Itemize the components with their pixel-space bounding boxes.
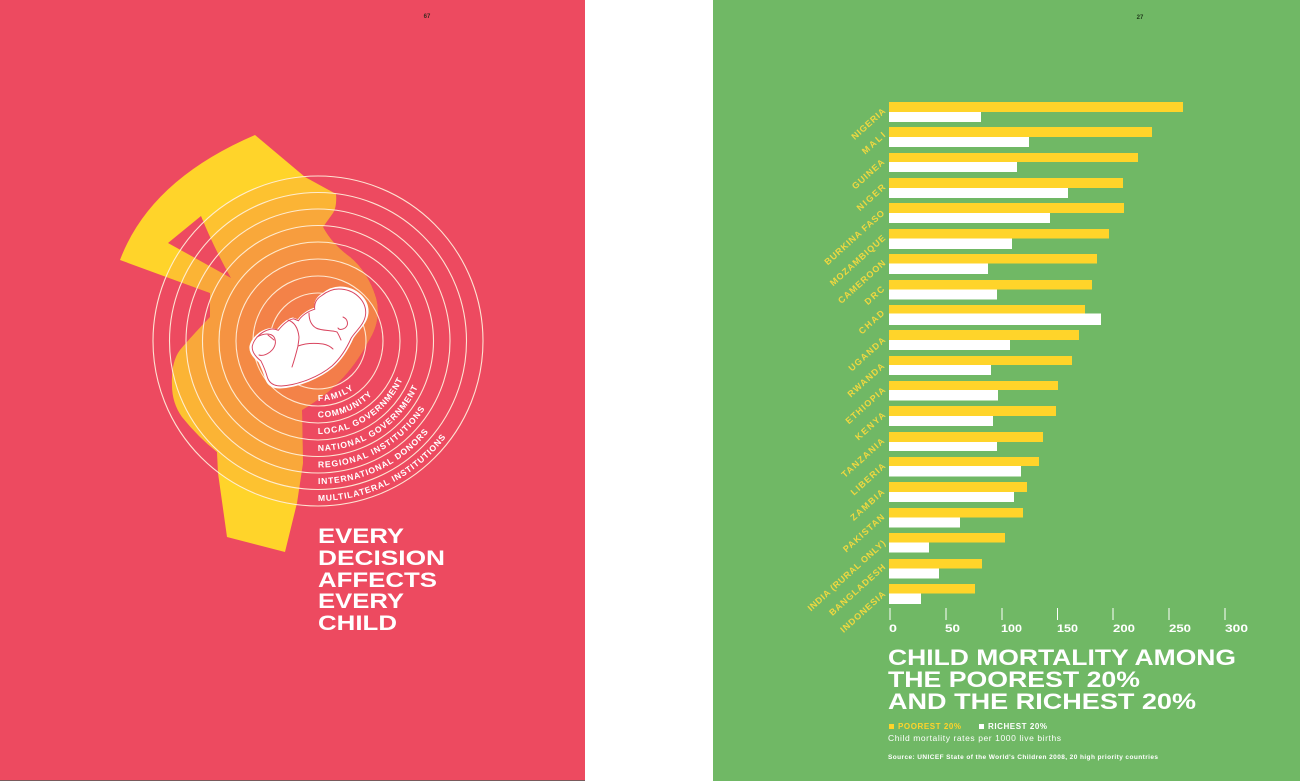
x axis labels: 300 — [1225, 623, 1248, 635]
x axis labels: 200 — [1113, 623, 1135, 635]
icon: fetus — [250, 287, 368, 388]
country labels: PAKISTAN — [841, 512, 886, 554]
heading: child mortality: AND THE RICHEST 20% — [888, 689, 1196, 714]
x axis labels: 100 — [1001, 623, 1022, 635]
poorest 20% bars — [889, 102, 1183, 594]
page number right: 27 — [1137, 15, 1144, 21]
label: family: FAMILY — [318, 384, 352, 401]
chart subtitle: Child mortality rates per 1000 live births — [888, 733, 1061, 743]
concentric rings — [153, 176, 483, 506]
page number left: 67 — [424, 14, 431, 20]
label: national government: NATIONAL GOVERNMENT — [318, 384, 417, 451]
bar chart: child mortality — [806, 102, 1248, 635]
x axis labels: 150 — [1057, 623, 1078, 635]
icon: pregnant woman silhouette with tinted rings — [120, 135, 378, 552]
label: multilateral institutions: MULTILATERAL INSTITUTIONS — [318, 434, 445, 501]
country labels: NIGER — [855, 182, 888, 213]
country labels: ETHIOPIA — [843, 385, 888, 426]
country labels: DRC — [863, 284, 887, 307]
label: international donors: INTERNATIONAL DONORS — [318, 429, 428, 484]
country labels: NIGERIA — [849, 106, 888, 142]
heading: child mortality: CHILD MORTALITY AMONG — [888, 645, 1236, 670]
country labels: INDIA (RURAL ONLY) — [806, 538, 887, 613]
x axis labels: 0 — [889, 623, 897, 635]
richest 20% bars — [889, 112, 1101, 604]
country labels: INDONESIA — [838, 589, 888, 635]
heading: every decision affects every child: AFFECTS — [318, 569, 437, 592]
country labels: CHAD — [857, 308, 887, 336]
country labels: TANZANIA — [840, 436, 887, 480]
label: local government: LOCAL GOVERNMENT — [318, 377, 402, 434]
legend: POOREST 20% — [898, 722, 961, 731]
legend: RICHEST 20% — [988, 722, 1047, 731]
ring labels — [318, 377, 445, 501]
x axis ticks — [890, 608, 1225, 620]
country labels: ZAMBIA — [848, 487, 887, 523]
heading: every decision affects every child: EVERY — [318, 590, 404, 613]
legend — [889, 722, 1047, 731]
source note: Source: UNICEF State of the World's Children 2008, 20 high priority countries — [888, 754, 1158, 761]
heading: every decision affects every child: DECISION — [318, 547, 445, 570]
panel: left red page — [0, 0, 585, 781]
country labels: BURKINA FASO — [822, 208, 886, 267]
country labels — [806, 106, 888, 635]
country labels: BANGLADESH — [827, 562, 887, 618]
panel: right green page — [713, 0, 1300, 781]
country labels: KENYA — [853, 410, 888, 442]
label: community: COMMUNITY — [318, 390, 370, 418]
label: regional institutions: REGIONAL INSTITUTIONS — [318, 406, 424, 468]
country labels: RWANDA — [845, 361, 887, 399]
heading: child mortality — [888, 645, 1236, 714]
heading: every decision affects every child: CHILD — [318, 612, 397, 635]
x axis labels — [889, 623, 1248, 635]
heading: every decision affects every child — [318, 525, 445, 635]
country labels: MOZAMBIQUE — [828, 233, 887, 288]
x axis labels: 50 — [945, 623, 960, 635]
x axis labels: 250 — [1169, 623, 1191, 635]
heading: child mortality: THE POOREST 20% — [888, 667, 1140, 692]
country labels: CAMEROON — [836, 258, 887, 306]
country labels: UGANDA — [846, 335, 888, 373]
country labels: GUINEA — [850, 157, 887, 191]
country labels: MALI — [860, 130, 887, 156]
country labels: LIBERIA — [849, 461, 888, 497]
heading: every decision affects every child: EVERY — [318, 525, 404, 548]
